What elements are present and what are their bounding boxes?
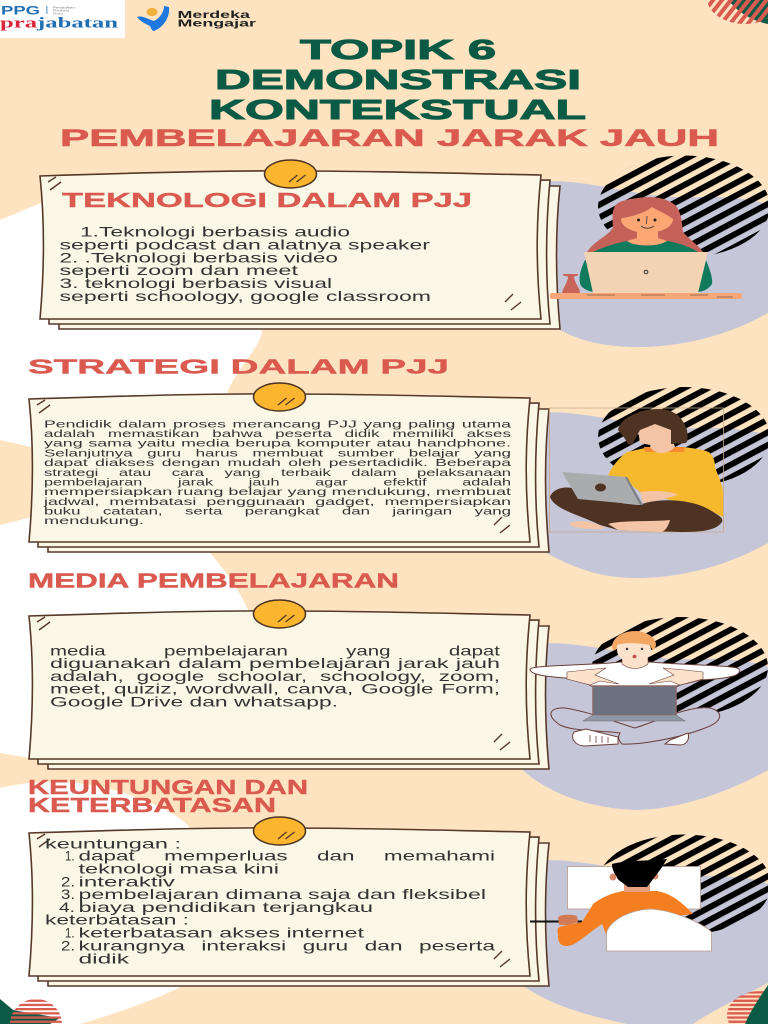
figure: seated woman with grey laptop (550, 408, 724, 532)
text block: keuntungan: dapat memperluas dan memahami (78, 848, 495, 864)
stripe disc 4 (597, 834, 768, 934)
text block: teknologi: 2. .Teknologi berbasis video (60, 250, 338, 266)
text block: teknologi: 3. teknologi berbasis visual (60, 276, 332, 291)
text block: teknologi (60, 224, 431, 304)
text block: keuntungan: 2. (61, 938, 75, 954)
text block: strategi (42, 420, 511, 527)
background white shape upper (0, 195, 262, 758)
text block: keuntungan: pembelajaran dimana saja dan fleksibel (78, 887, 486, 902)
text block: keuntungan: interaktiv (78, 874, 175, 890)
text block: teknologi: seperti zoom dan meet (60, 263, 298, 278)
text block: keuntungan: keterbatasan akses internet (78, 926, 364, 940)
text block: keuntungan: keterbatasan : (45, 912, 189, 928)
text block: teknologi: seperti podcast dan alatnya speaker (60, 238, 431, 252)
card stack 2 (29, 383, 549, 552)
figure: man from behind at computer (530, 859, 712, 951)
text block: keuntungan: 2. (61, 874, 75, 890)
text block: media (50, 644, 500, 710)
panel: teknologi (40, 160, 560, 329)
text block: media: meet, quiziz, wordwall, canva, Google Form, (50, 682, 500, 696)
logo: Merdeka Mengajar: Merdeka (178, 9, 250, 21)
text block: keuntungan: keuntungan : (45, 836, 181, 852)
logo: PPG prajabatan (0, 0, 125, 38)
blob: lavender 3 (520, 643, 768, 810)
logo: PPG prajabatan: pra jabatan (0, 16, 119, 32)
text block: strategi: buku catatan, serta perangkat dan jaringan yang (44, 506, 511, 518)
text block: keuntungan: 4. (59, 900, 75, 915)
heading: keuntungan dan keterbatasan: KEUNTUNGAN DAN (28, 777, 308, 799)
decoration: bottom left corner (0, 999, 62, 1024)
title: KONTEKSTUAL (209, 94, 586, 125)
text block: teknologi: seperti schoology, google classroom (60, 289, 431, 304)
stripe disc 1 (598, 156, 768, 258)
text block: media: Google Drive dan whatsapp. (50, 694, 338, 710)
decoration: bottom right corner (727, 985, 768, 1024)
text block: strategi: Selanjutnya guru harus membuat sumber belajar yang (44, 448, 511, 460)
logo: PPG prajabatan: Pendidikan (53, 6, 75, 10)
figure: man pointing at laptop (530, 631, 739, 746)
text block: media: media pembelajaran yang dapat (50, 644, 500, 658)
text block: media: adalah, google schoolar, schoology, zoom, (50, 669, 500, 684)
text block: strategi: Pendidik dalam proses merancang PJJ yang paling utama (44, 420, 511, 430)
text block: media: diguanakan dalam pembelajaran jarak jauh (50, 656, 500, 671)
text block: strategi: yang sama yaitu media berupa komputer atau handphone. (44, 438, 511, 450)
blob: lavender 2 (540, 412, 768, 578)
heading: keuntungan dan keterbatasan: KETERBATASAN (28, 795, 276, 817)
title (209, 34, 586, 125)
text block: strategi: strategi atau cara yang terbaik dalam pelaksanaan (44, 468, 511, 479)
text block: strategi: jadwal, membatasi penggunaan gadget, mempersiapkan (42, 497, 511, 508)
text block: teknologi: 1.Teknologi berbasis audio (80, 224, 350, 240)
text block: keuntungan (45, 836, 496, 966)
text block: strategi: adalah memastikan bahwa peserta didik memiliki akses (44, 429, 511, 440)
figure: woman with laptop at table (550, 197, 742, 299)
text block: strategi: mempersiapkan ruang belajar yang mendukung, membuat (44, 487, 511, 498)
background peach wedge (0, 440, 40, 525)
background white shape lower (0, 782, 195, 1024)
card stack 4 (29, 817, 549, 986)
panel: strategi (29, 383, 549, 552)
text block: strategi: pembelajaran jarak jauh agar efektif adalah (44, 478, 511, 488)
subtitle: PEMBELAJARAN JARAK JAUH (60, 125, 719, 152)
logo: Merdeka Mengajar: Mengajar (178, 18, 256, 30)
decoration: top right corner (707, 0, 768, 24)
panel: keuntungan (29, 817, 549, 986)
text block: keuntungan: biaya pendidikan terjangkau (78, 900, 373, 915)
card stack 3 (29, 600, 549, 769)
blob: lavender 1 (545, 181, 768, 347)
text block: strategi: dapat diakses dengan mudah oleh pesertadidik. Beberapa (44, 458, 511, 469)
heading: media pembelajaran: MEDIA PEMBELAJARAN (28, 570, 399, 592)
title: TOPIK 6 (300, 34, 496, 65)
text block: keuntungan: didik (78, 952, 129, 966)
panel: media (29, 600, 549, 769)
text block: keuntungan: teknologi masa kini (78, 862, 279, 876)
blob: lavender 4 (522, 860, 768, 1024)
card stack 1 (40, 160, 560, 329)
logo: Merdeka Mengajar (137, 6, 256, 31)
text block: keuntungan: kurangnya interaksi guru dan peserta (78, 938, 496, 954)
text block: keuntungan: 1. (65, 926, 74, 940)
title: DEMONSTRASI (215, 64, 581, 95)
text block: keuntungan: 1. (65, 848, 74, 864)
text block: strategi: mendukung. (44, 516, 144, 527)
stripe disc 3 (592, 617, 768, 717)
logo: PPG prajabatan: Guru (53, 12, 63, 16)
stripe disc 2 (598, 387, 768, 487)
logo: PPG prajabatan: Profesi (53, 8, 70, 12)
heading: keuntungan dan keterbatasan (28, 777, 308, 817)
text block: keuntungan: 3. (61, 887, 75, 902)
heading: strategi dalam pjj: STRATEGI DALAM PJJ (28, 356, 449, 378)
heading: teknologi dalam pjj: TEKNOLOGI DALAM PJJ (62, 190, 472, 212)
logo: PPG prajabatan: PPG (1, 4, 40, 18)
